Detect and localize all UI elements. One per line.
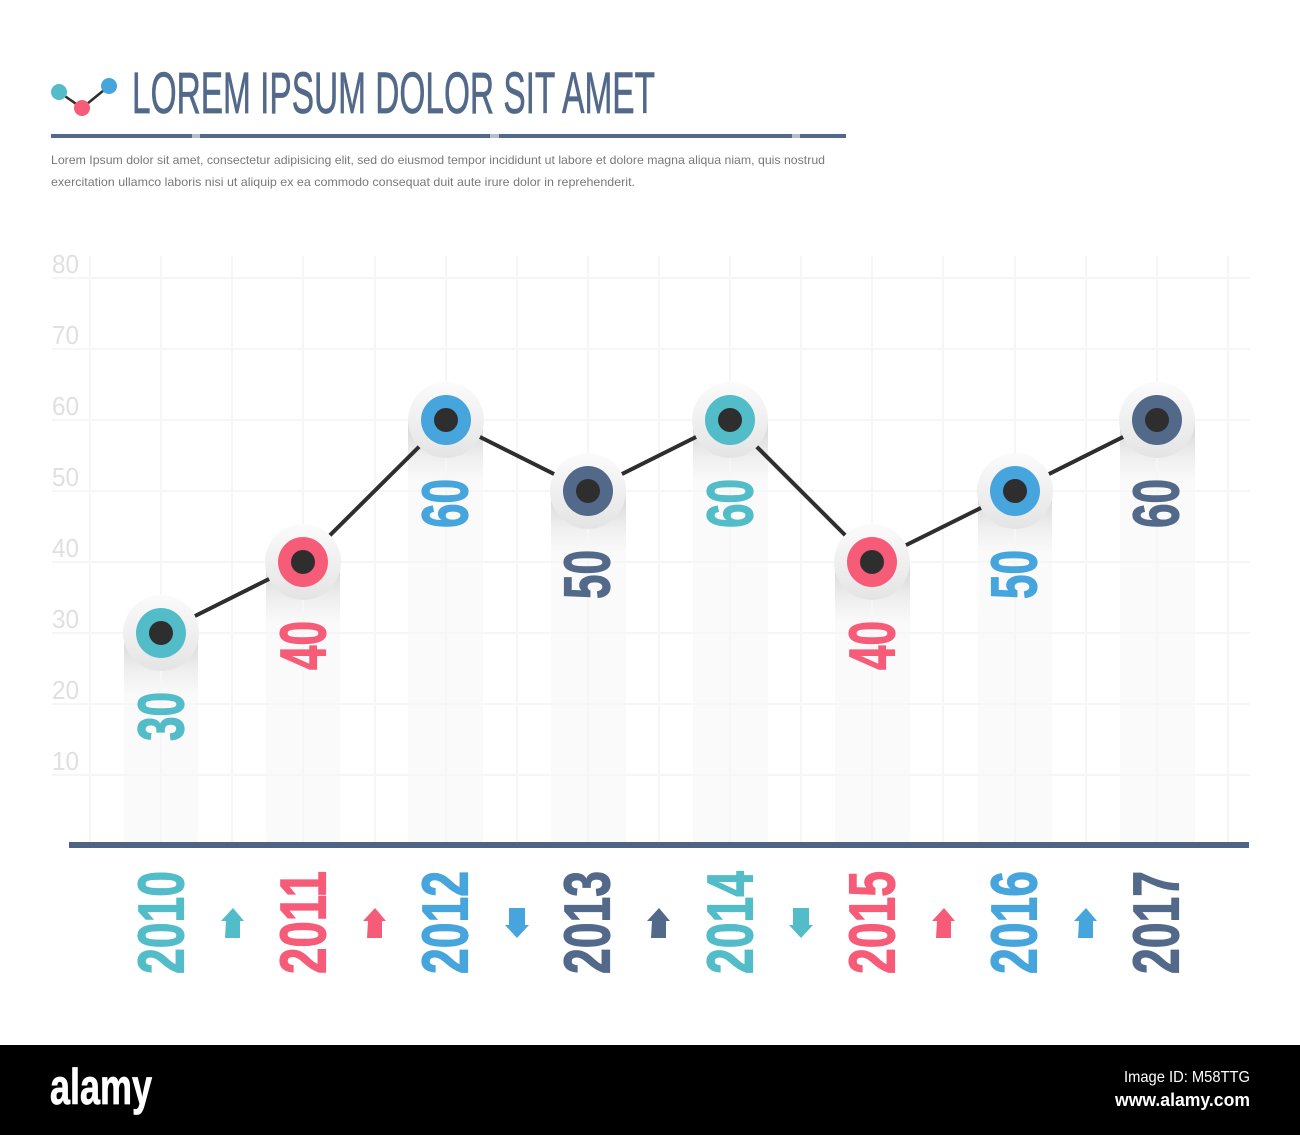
value labels: 40 [266,621,340,670]
column bands [124,420,1195,842]
year labels: 2013 [550,871,624,974]
year labels [124,871,1192,974]
footer bar [0,1045,1300,1135]
image id: Image ID: M58TTG [1124,1069,1250,1086]
column shadows under discs [124,420,1195,695]
data point 2017 [1119,382,1195,458]
data point 2012 [408,382,484,458]
y axis labels: 60 [52,391,79,421]
y axis labels: 10 [52,746,79,776]
icon: arrow up blue [1074,908,1097,938]
data point 2011 [265,524,341,600]
value labels: 50 [550,550,624,599]
chart grid [52,256,1250,842]
footer url: www.alamy.com [1114,1090,1250,1110]
year labels: 2015 [836,871,908,974]
value labels [124,479,1192,741]
title: LOREM IPSUM DOLOR SIT AMET [132,61,655,126]
icon: arrow up teal [221,908,244,938]
y axis labels: 40 [52,533,79,563]
data point 2010 [123,595,199,671]
value labels: 60 [1120,479,1192,528]
x axis [69,842,1249,848]
value labels: 40 [836,621,908,670]
year labels: 2017 [1120,871,1192,974]
value labels: 50 [978,550,1050,599]
y axis labels: 20 [52,675,79,705]
icon: mini line chart [51,78,117,116]
y axis labels [52,249,79,776]
year labels: 2014 [694,871,766,974]
data point 2014 [692,382,768,458]
data point 2015 [834,524,910,600]
header rule [51,134,846,138]
y axis labels: 80 [52,249,79,279]
icon: arrow up navy [647,908,670,938]
value labels: 30 [124,692,198,741]
footer logo: alamy [50,1059,152,1115]
data point 2016 [977,453,1053,529]
icon: arrow down blue [505,908,529,938]
year labels: 2011 [266,871,340,974]
data line [161,420,1157,633]
year labels: 2012 [408,871,482,974]
y axis labels: 30 [52,604,79,634]
intro text [51,153,825,189]
icon: arrow up red [932,908,955,938]
year labels: 2016 [978,871,1050,974]
icon: arrow up red [363,908,386,938]
intro text: Lorem Ipsum dolor sit amet, consectetur adipisicing elit, sed do eiusmod tempor incididunt ut labore et dolore magna aliqua niam, quis nostrud [51,153,825,167]
icon: arrow down teal [789,908,813,938]
y axis labels: 70 [52,320,79,350]
y axis labels: 50 [52,462,79,492]
year labels: 2010 [124,871,198,974]
data point 2013 [550,453,626,529]
value labels: 60 [408,479,482,528]
intro text: exercitation ullamco laboris nisi ut aliquip ex ea commodo consequat duit aute irure dolor in reprehenderit. [51,175,635,189]
value labels: 60 [694,479,766,528]
